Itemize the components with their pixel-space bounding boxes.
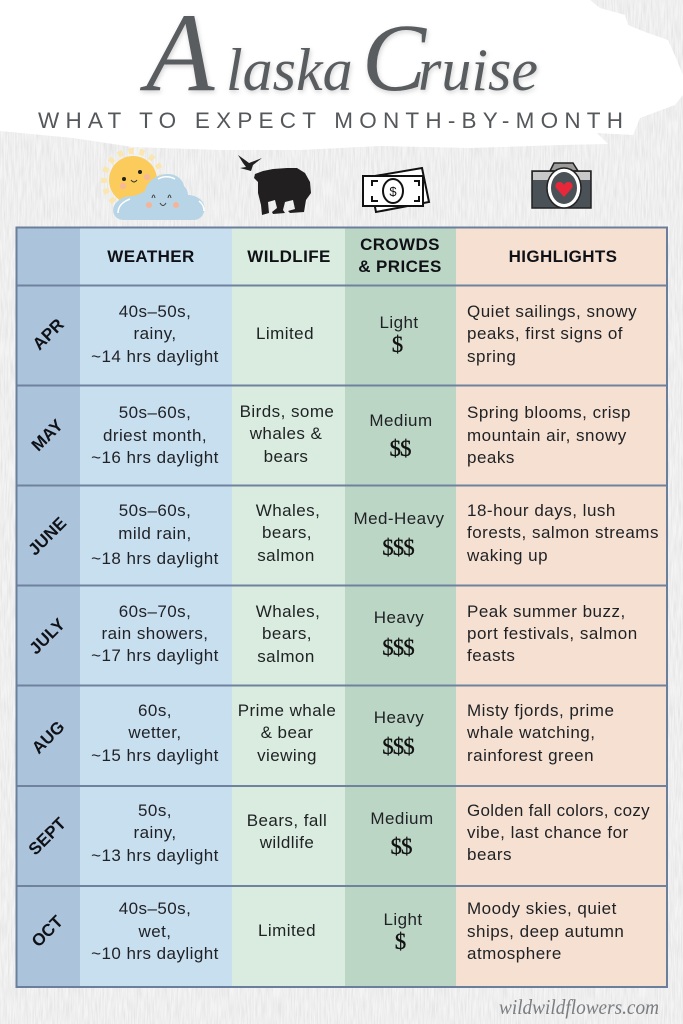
title: laska [226, 37, 353, 103]
row: June: salmon [257, 546, 315, 565]
row: April: APR [29, 315, 68, 354]
row: August: AUG [28, 717, 69, 758]
row: September: 50s, [138, 801, 172, 820]
row: July: bears, [262, 624, 312, 643]
row: August: rainforest green [467, 746, 594, 765]
row: October: Moody skies, quiet [467, 899, 617, 918]
header row: HIGHLIGHTS [509, 247, 617, 266]
row: October: 40s–50s, [119, 899, 191, 918]
column: crowds and prices [345, 227, 456, 987]
row: July: port festivals, salmon [467, 624, 638, 643]
row: October: ~10 hrs daylight [91, 944, 219, 963]
row: October: ships, deep autumn [467, 922, 624, 941]
row: July: 60s–70s, [119, 602, 191, 621]
column: highlights [456, 227, 667, 987]
row: September: ~13 hrs daylight [91, 846, 219, 865]
title: C [362, 4, 427, 111]
row: June: forests, salmon streams [467, 523, 659, 542]
row: July: Whales, [256, 602, 320, 621]
row: September [25, 801, 650, 865]
row: July: Heavy [374, 608, 424, 627]
icon: sun and cloud [104, 151, 204, 220]
row: August: Prime whale [238, 701, 336, 720]
row: October: OCT [28, 911, 67, 951]
header row: WILDLIFE [247, 247, 331, 266]
row: May [28, 402, 631, 467]
row: August: & bear [261, 723, 313, 742]
table [16, 227, 667, 987]
row: August: Misty fjords, prime [467, 701, 614, 720]
row: May: ~16 hrs daylight [91, 448, 219, 467]
column: wildlife [232, 227, 345, 987]
row: September: $$ [390, 834, 412, 859]
row: September: wildlife [259, 833, 314, 852]
row: May: whales & [249, 424, 322, 443]
header row: WEATHER [107, 247, 195, 266]
row: May: Spring blooms, crisp [467, 403, 631, 422]
row: May: driest month, [103, 426, 207, 445]
row: August [28, 701, 614, 765]
row: May: bears [264, 447, 308, 466]
subtitle: WHAT TO EXPECT MONTH-BY-MONTH [38, 108, 628, 133]
row: May: Birds, some [240, 402, 334, 421]
row: July: $$$ [382, 635, 414, 660]
row: June: bears, [262, 523, 312, 542]
row: October: $ [395, 929, 406, 954]
row: May: Medium [369, 411, 433, 430]
row: June: JUNE [24, 513, 70, 559]
row: July [26, 602, 638, 666]
row: June: $$$ [382, 535, 414, 560]
row: April: spring [467, 347, 516, 366]
row: July: feasts [467, 646, 515, 665]
row: August: Heavy [374, 708, 424, 727]
row: September: rainy, [133, 823, 177, 842]
column: weather [80, 227, 232, 987]
title [139, 0, 538, 115]
column: months [16, 227, 80, 987]
row: April [29, 302, 637, 366]
row: September: Medium [370, 809, 434, 828]
row: June: Whales, [256, 501, 320, 520]
row: July: rain showers, [102, 624, 208, 643]
row: October: Limited [258, 921, 316, 940]
row: June: 18-hour days, lush [467, 501, 616, 520]
row: September: SEPT [25, 813, 70, 859]
row: October: atmosphere [467, 944, 562, 963]
row: July: Peak summer buzz, [467, 602, 626, 621]
row: October: wet, [138, 922, 171, 941]
website credit: wildwildflowers.com [499, 995, 659, 1019]
row: September: Golden fall colors, cozy [467, 801, 650, 820]
icon: camera with heart [532, 163, 591, 208]
header row: CROWDS [360, 235, 440, 254]
row: October [28, 899, 624, 963]
row: May: MAY [28, 415, 67, 455]
row: April: Limited [256, 324, 314, 343]
row: April: ~14 hrs daylight [91, 347, 219, 366]
row: June: mild rain, [118, 524, 192, 543]
row: August: ~15 hrs daylight [91, 746, 219, 765]
row: July: JULY [26, 614, 69, 658]
header row [107, 235, 617, 276]
row: September: vibe, last chance for [467, 823, 629, 842]
white brush stroke behind title [0, 0, 683, 150]
icon: bear and bird [238, 155, 311, 215]
row: August: whale watching, [466, 723, 595, 742]
title: ruise [418, 37, 538, 103]
row: June: waking up [466, 546, 548, 565]
row: September: bears [467, 845, 512, 864]
row: May: mountain air, snowy [467, 426, 627, 445]
row: April: peaks, first signs of [467, 324, 623, 343]
row: April: 40s–50s, [119, 302, 191, 321]
row: April: Quiet sailings, snowy [467, 302, 637, 321]
row: May: 50s–60s, [119, 403, 191, 422]
row: August: viewing [257, 746, 317, 765]
row: June: 50s–60s, [119, 501, 191, 520]
row: August: $$$ [382, 734, 414, 759]
row: September: Bears, fall [247, 811, 327, 830]
row: April: Light [379, 313, 419, 332]
icon: money bills: $ [389, 184, 397, 199]
row: June [24, 501, 659, 568]
header row: & PRICES [358, 257, 442, 276]
row: April: rainy, [133, 324, 177, 343]
row: October: Light [383, 910, 423, 929]
row: June: ~18 hrs daylight [91, 549, 219, 568]
row: July: salmon [257, 647, 315, 666]
row: August: 60s, [138, 701, 172, 720]
row: June: Med-Heavy [354, 509, 445, 528]
row: August: wetter, [127, 723, 182, 742]
row: May: peaks [467, 448, 515, 467]
row: May: $$ [390, 436, 411, 461]
row: April: $ [392, 332, 403, 357]
row: July: ~17 hrs daylight [91, 646, 219, 665]
icon: money bills [363, 168, 429, 212]
